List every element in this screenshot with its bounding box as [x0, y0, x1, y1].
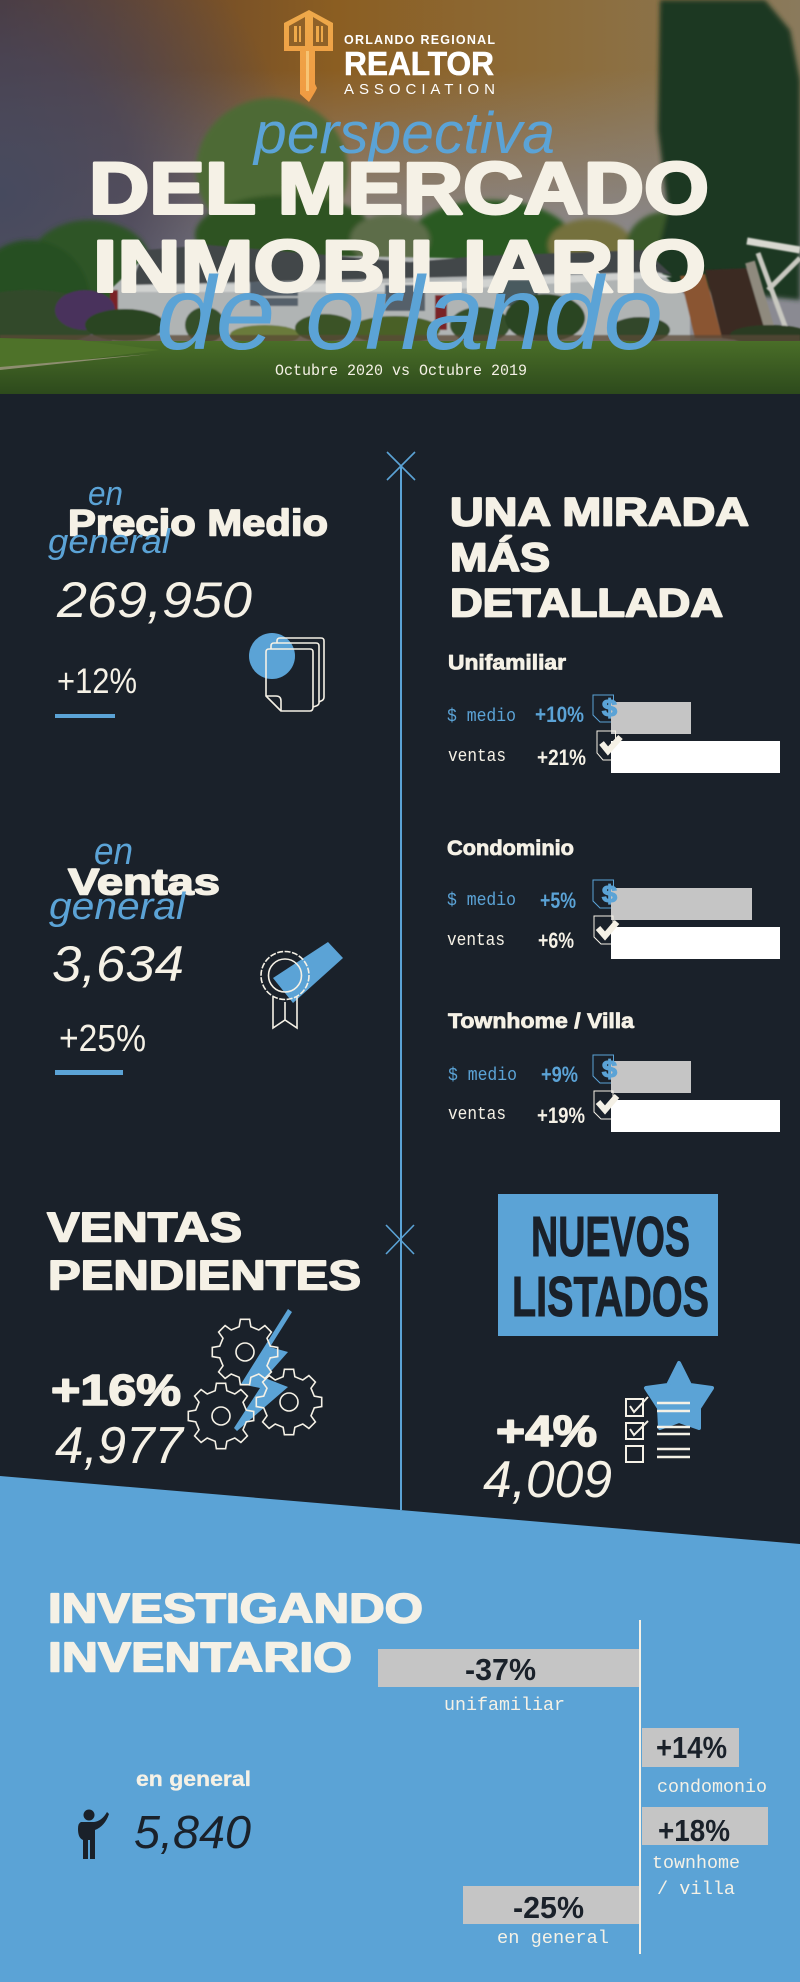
- heading: INVESTIGANDO: [48, 1584, 423, 1632]
- panel: precio medio: [48, 475, 328, 718]
- logo text: [344, 33, 495, 98]
- group: unifamiliar: $ medio: [447, 707, 516, 727]
- house walls: [112, 252, 690, 345]
- bar: +14% condominio: +14%: [656, 1730, 727, 1765]
- pergola: [747, 241, 800, 250]
- heading: [47, 1204, 361, 1298]
- bar: -37% unifamiliar: -37%: [465, 1652, 536, 1687]
- group: condominio: $: [602, 881, 618, 908]
- bar: +18% townhome villa: / villa: [657, 1880, 735, 1900]
- title: del mercado inmobiliario: DEL MERCADO: [89, 148, 709, 230]
- group: condominio: +6%: [538, 928, 574, 953]
- group: townhome villa: +19%: [537, 1103, 585, 1128]
- bar: -25% en general: -25%: [513, 1890, 584, 1925]
- axis line: [639, 1620, 641, 1954]
- accent bar: [55, 1070, 123, 1075]
- heading: INVENTARIO: [48, 1634, 352, 1680]
- roof: [130, 245, 672, 285]
- value: 269,950: 269,950: [56, 572, 252, 628]
- heading: [48, 1584, 423, 1680]
- group: townhome villa: $ medio: [448, 1066, 517, 1086]
- group: condominio: +5%: [540, 888, 576, 913]
- title: perspectiva: perspectiva: [252, 101, 555, 166]
- group: condominio: Condominio: [447, 837, 574, 860]
- hero photo background: [0, 0, 800, 394]
- value: 4,009: 4,009: [483, 1451, 612, 1509]
- logo text: ASSOCIATION: [344, 81, 495, 98]
- heading: [450, 490, 749, 626]
- bar: -37% unifamiliar: [378, 1649, 639, 1716]
- panel: investigando inventario: [0, 1476, 800, 1982]
- group: condominio: $ medio: [447, 891, 516, 911]
- blue angled background: [0, 1476, 800, 1982]
- panel: ventas: [49, 831, 343, 1075]
- bar: +18% townhome villa: +18%: [658, 1813, 730, 1848]
- group: townhome villa: ventas: [448, 1105, 506, 1125]
- icon: medal with check: [261, 942, 343, 1028]
- heading box: LISTADOS: [512, 1265, 709, 1329]
- change: +4%: +4%: [496, 1407, 597, 1456]
- heading box: [498, 1194, 718, 1336]
- wooden fence: [680, 274, 722, 338]
- group: unifamiliar: [447, 652, 780, 773]
- accent bar: [55, 714, 115, 718]
- bar: -37% unifamiliar: unifamiliar: [444, 1696, 565, 1716]
- label: general: general: [48, 523, 172, 561]
- icon: orange house key: [284, 10, 333, 102]
- change: +25%: +25%: [59, 1018, 146, 1060]
- group: unifamiliar: +10%: [535, 702, 584, 727]
- logo: Orlando Regional Realtor Association: [284, 10, 495, 102]
- value: 3,634: 3,634: [52, 936, 184, 992]
- heading: precio medio: Precio Medio: [68, 502, 328, 544]
- bar: +14% condominio: condomonio: [657, 1778, 767, 1798]
- date subtitle: Octubre 2020 vs Octubre 2019: [275, 362, 527, 380]
- group: unifamiliar: Unifamiliar: [448, 652, 566, 674]
- bar: -25% en general: en general: [497, 1929, 609, 1949]
- heading: MÁS: [450, 535, 550, 580]
- heading: ventas: Ventas: [68, 862, 220, 902]
- bar: -25% en general: [463, 1886, 639, 1949]
- icon: star with checklist: [626, 1363, 712, 1462]
- garden shrubs: [0, 290, 105, 346]
- group: townhome villa: $: [602, 1056, 618, 1083]
- center divider with crosses: [386, 452, 415, 1510]
- bar: +18% townhome villa: [642, 1807, 768, 1900]
- logo text: ORLANDO REGIONAL: [344, 33, 495, 47]
- bar: +14% condominio: [642, 1728, 767, 1798]
- group: unifamiliar: ventas: [448, 747, 506, 767]
- group: unifamiliar: +21%: [537, 745, 586, 770]
- icon: documents: [249, 633, 324, 711]
- bar: +18% townhome villa: townhome: [652, 1854, 740, 1874]
- icon: person pointing: [78, 1810, 109, 1859]
- group: townhome villa: Townhome / Villa: [448, 1010, 634, 1033]
- panel: nuevos listados: [483, 1194, 718, 1509]
- heading: UNA MIRADA: [450, 490, 749, 534]
- value: 5,840: 5,840: [134, 1806, 251, 1858]
- group: townhome villa: [448, 1010, 780, 1132]
- group: condominio: ventas: [447, 931, 505, 951]
- label: en: en: [94, 831, 133, 873]
- label: en general: en general: [136, 1768, 251, 1791]
- title: de orlando: de orlando: [156, 256, 663, 372]
- title: del mercado inmobiliario: [89, 148, 709, 308]
- change: +12%: +12%: [57, 662, 137, 701]
- group: townhome villa: +9%: [541, 1062, 578, 1087]
- panel: ventas pendientes: [47, 1204, 361, 1475]
- logo text: REALTOR: [344, 45, 494, 82]
- panel: una mirada mas detallada: [447, 490, 780, 1132]
- icon: gears with lightning bolt: [188, 1309, 322, 1449]
- heading box: NUEVOS: [531, 1205, 690, 1269]
- change: +16%: +16%: [51, 1366, 181, 1415]
- heading: PENDIENTES: [48, 1252, 361, 1298]
- heading: VENTAS: [47, 1204, 242, 1250]
- label: en: en: [88, 475, 123, 513]
- heading: DETALLADA: [450, 582, 723, 626]
- value: 4,977: 4,977: [55, 1417, 185, 1475]
- group: condominio: [447, 837, 780, 959]
- label: general: general: [49, 886, 187, 928]
- title: del mercado inmobiliario: INMOBILIARIO: [93, 226, 706, 308]
- group: unifamiliar: $: [602, 695, 618, 722]
